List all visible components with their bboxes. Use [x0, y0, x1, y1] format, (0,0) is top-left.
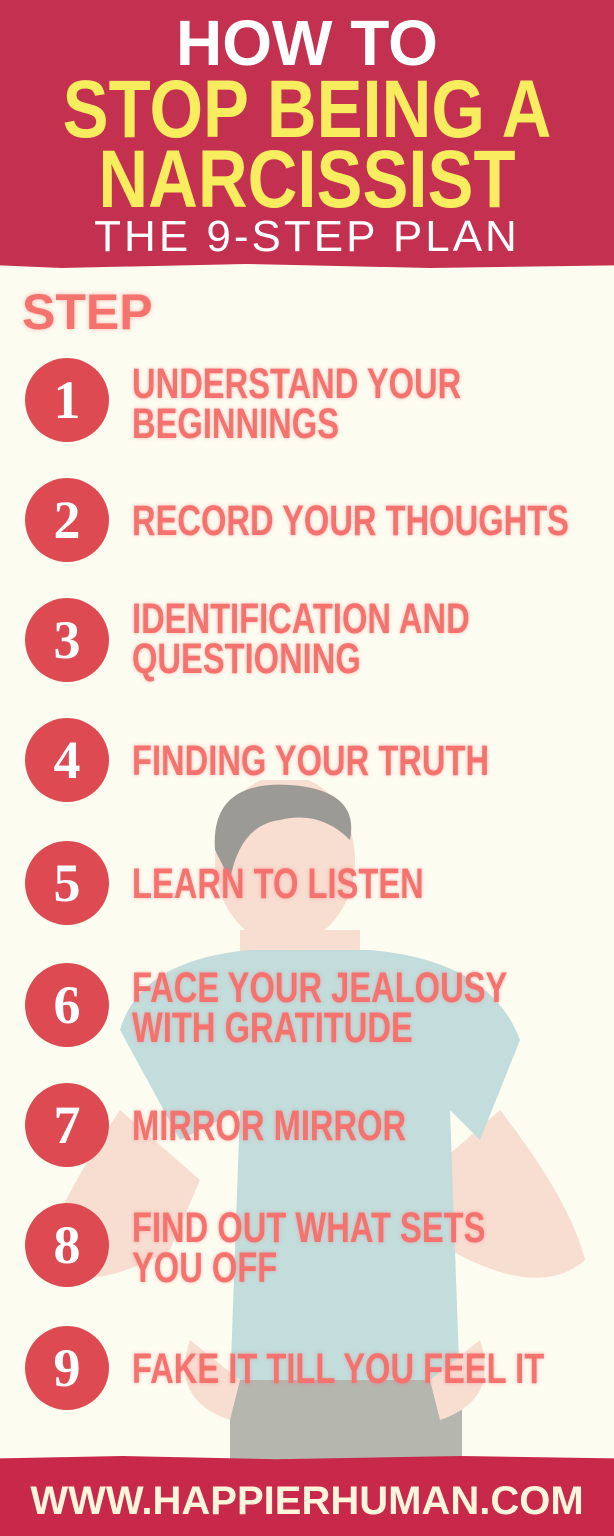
- step 7: 7: [54, 1095, 80, 1155]
- step 6: WITH GRATITUDE: [132, 1004, 413, 1052]
- step 4: 4: [54, 730, 80, 790]
- title: HOW TO: [176, 7, 438, 79]
- step 6: 6: [54, 975, 80, 1035]
- footer url: WWW.HAPPIERHUMAN.COM: [30, 1479, 584, 1523]
- step 1: UNDERSTAND YOUR: [132, 360, 461, 408]
- step 4: [25, 718, 489, 802]
- header banner: [0, 0, 614, 268]
- step 7: MIRROR MIRROR: [132, 1102, 406, 1150]
- footer banner: [0, 1456, 614, 1536]
- step 3: IDENTIFICATION AND: [132, 595, 470, 643]
- step 3: [25, 595, 470, 684]
- step 3: QUESTIONING: [132, 635, 361, 683]
- step heading: STEP: [22, 284, 153, 340]
- step 2: 2: [54, 490, 80, 550]
- step 6: FACE YOUR JEALOUSY: [132, 964, 507, 1012]
- step 9: FAKE IT TILL YOU FEEL IT: [132, 1345, 544, 1393]
- step 8: YOU OFF: [132, 1244, 277, 1292]
- step 9: 9: [54, 1338, 80, 1398]
- step 1: 1: [54, 370, 80, 430]
- step 5: LEARN TO LISTEN: [132, 860, 424, 908]
- subtitle: THE 9-STEP PLAN: [94, 212, 520, 261]
- step 3: 3: [54, 610, 80, 670]
- step 1: BEGINNINGS: [132, 400, 339, 448]
- step 4: FINDING YOUR TRUTH: [132, 737, 489, 785]
- step 2: [25, 478, 570, 562]
- title: NARCISSIST: [98, 134, 516, 225]
- illustration: man: [64, 780, 585, 1460]
- step 8: [25, 1203, 486, 1292]
- step 8: FIND OUT WHAT SETS: [132, 1204, 485, 1252]
- step 9: [25, 1326, 546, 1410]
- title: STOP BEING A: [63, 64, 551, 155]
- step 2: RECORD YOUR THOUGHTS: [132, 497, 569, 545]
- step 1: [25, 358, 462, 448]
- step 5: 5: [54, 853, 80, 913]
- step 7: [25, 1083, 406, 1167]
- step 6: [25, 963, 508, 1052]
- title: [63, 7, 551, 225]
- step 5: [25, 841, 424, 925]
- step 8: 8: [54, 1215, 80, 1275]
